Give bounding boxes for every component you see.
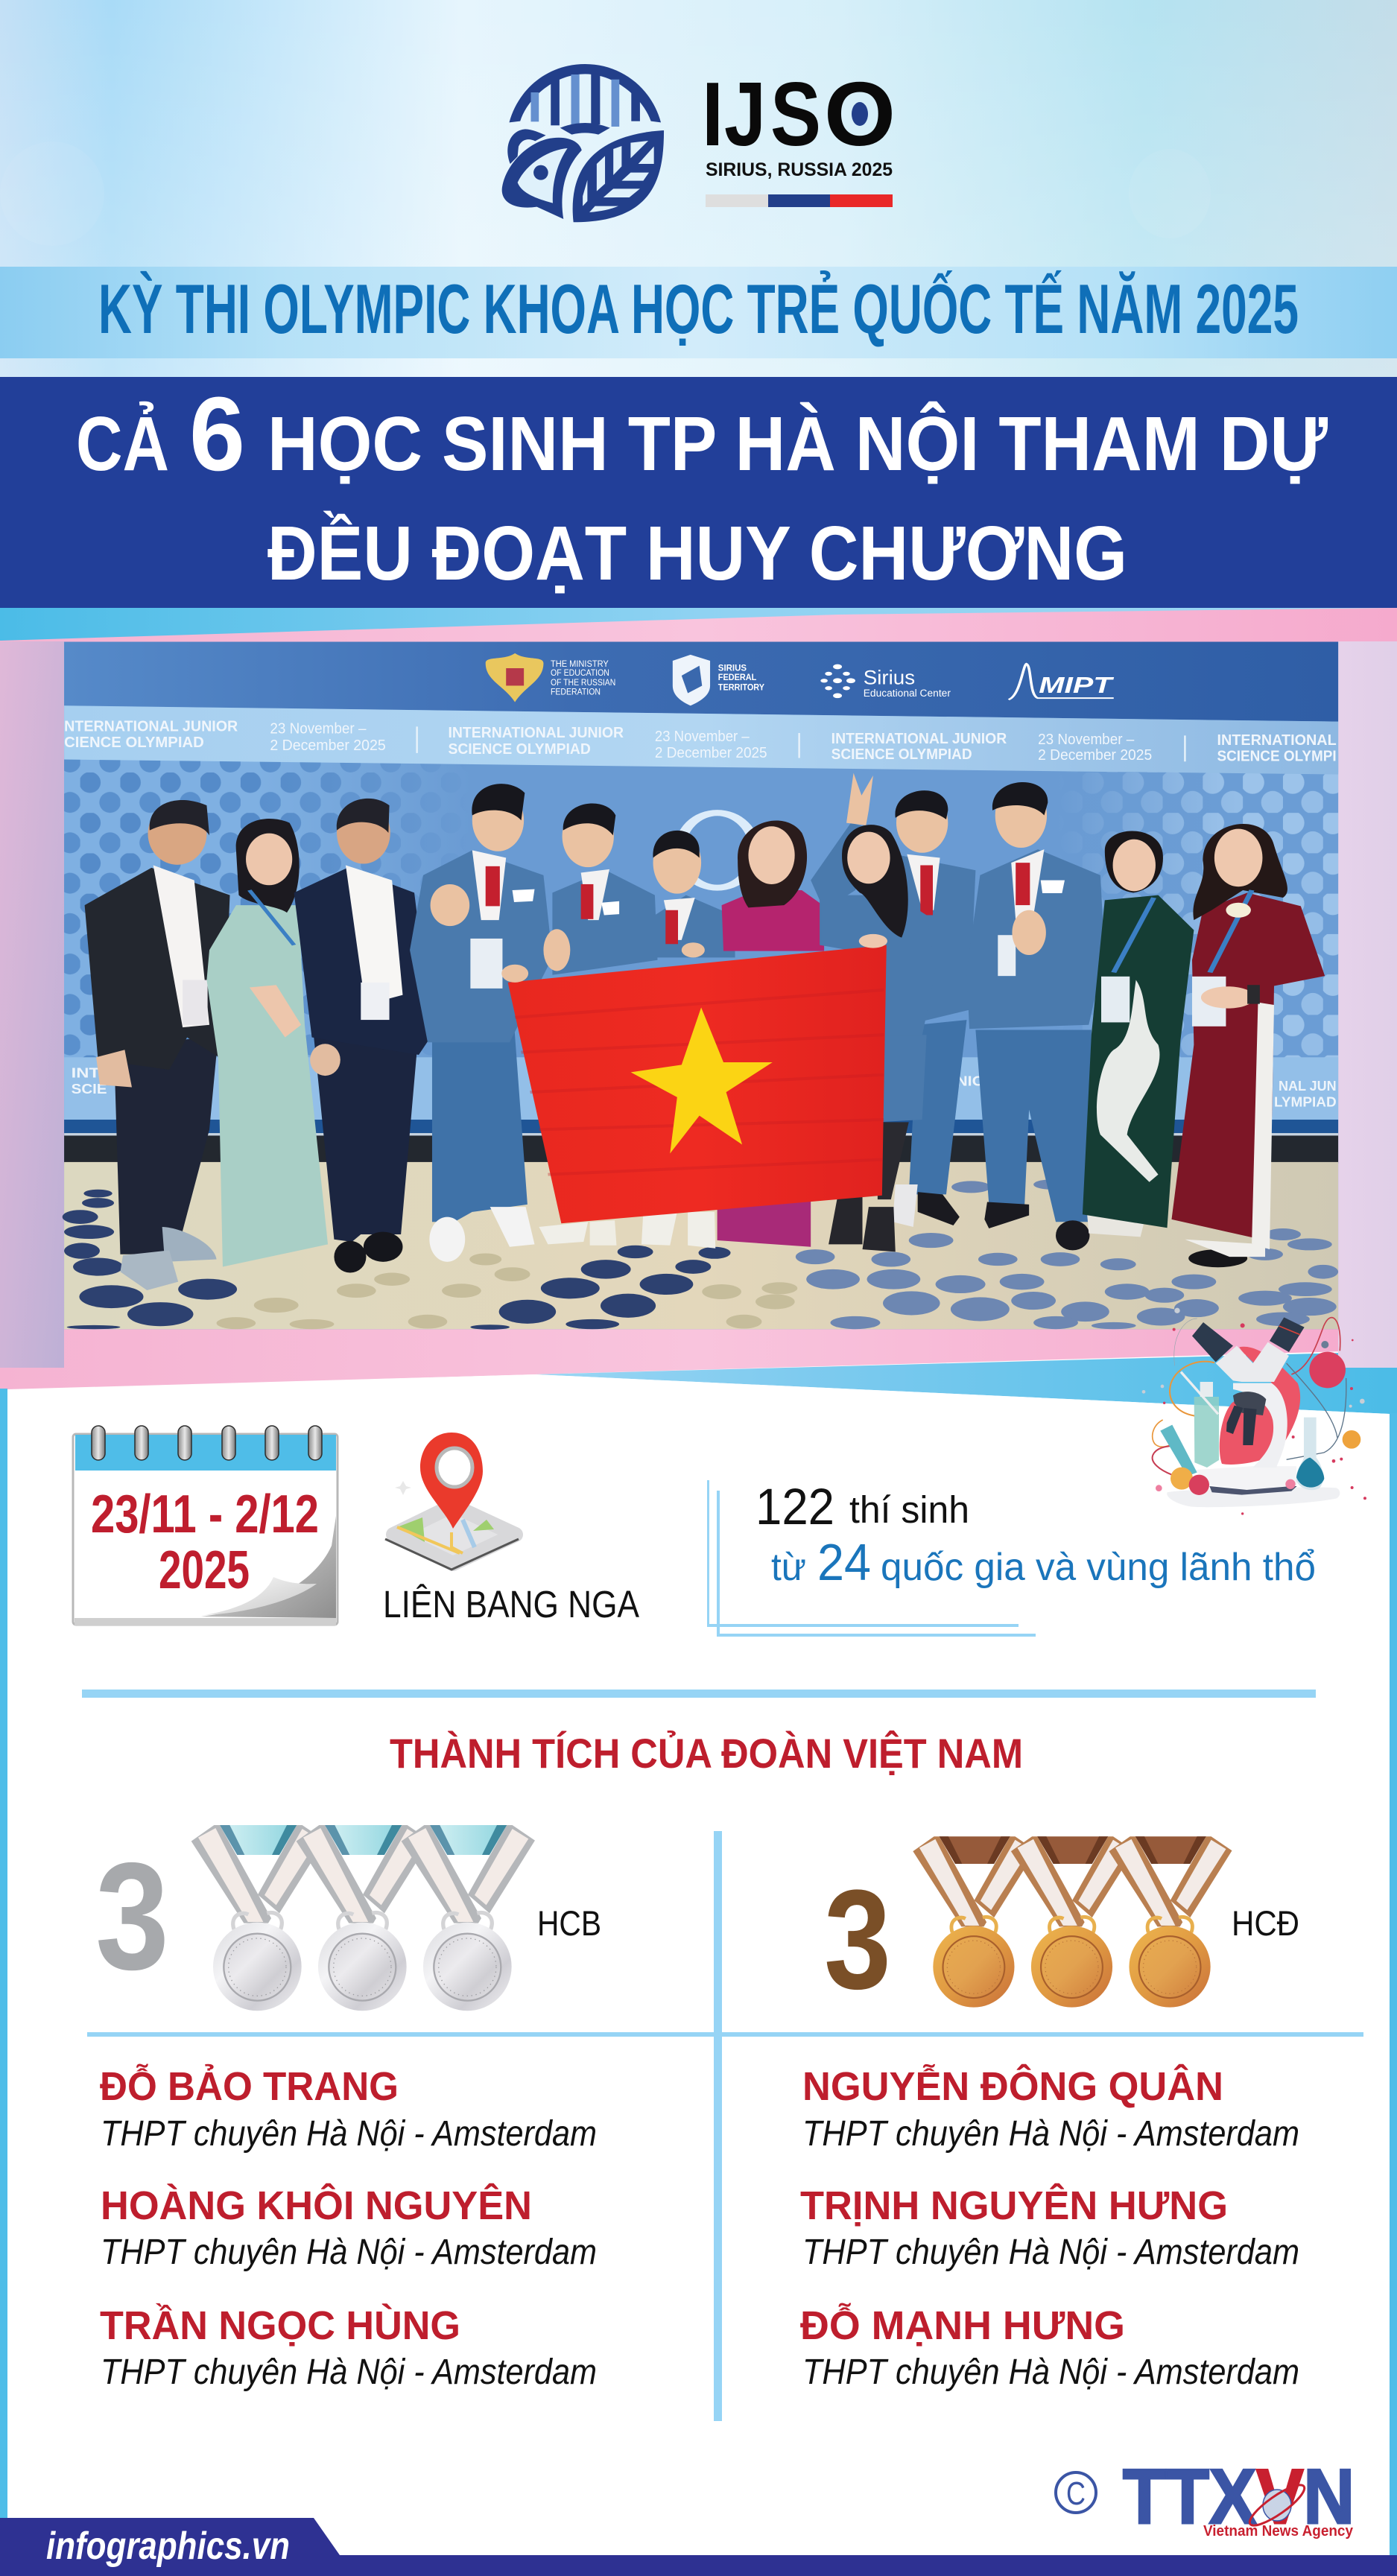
winner: Đỗ Bảo Trang: ĐỖ BẢO TRANG: [100, 2063, 399, 2109]
TTXVN logo: Vietnam News Agency: [1203, 2523, 1354, 2539]
photo backdrop banner: NTERNATIONAL JUNIOR: [64, 718, 238, 735]
red swirl: [1220, 1347, 1300, 1465]
photo lower backdrop: NAL JUN: [1279, 1078, 1337, 1094]
photo lower backdrop: LYMPIAD: [1274, 1094, 1337, 1110]
balls: [1309, 1352, 1346, 1388]
silver medal count: 3: [95, 1831, 169, 2002]
TTXVN logo: TTXVN: [1123, 2454, 1355, 2540]
photo backdrop banner: INTERNATIONAL JUNIOR: [831, 731, 1007, 747]
logo wordmark: J: [724, 63, 766, 165]
calendar year: 2025: [159, 1541, 250, 1600]
winner: Trần Ngọc Hùng: THPT chuyên Hà Nội - Amsterdam: [101, 2353, 597, 2392]
winner: Đỗ Mạnh Hưng: ĐỖ MẠNH HƯNG: [800, 2303, 1125, 2348]
photo carpet: [63, 1162, 1338, 1330]
photo backdrop banner: 2 December 2025: [1038, 747, 1152, 764]
bronze winners list: [800, 2063, 1299, 2392]
photo backdrop banner: OF EDUCATION: [551, 667, 609, 678]
grid lines: [87, 1831, 1363, 2421]
winner: Trần Ngọc Hùng: [100, 2303, 597, 2392]
photo backdrop banner: SIRIUS: [718, 662, 747, 673]
logo dot: [852, 102, 868, 126]
photo backdrop banner: SCIENCE OLYMPIAD: [448, 741, 591, 758]
person 10: tall boy blue suit: [966, 782, 1105, 1250]
title line 1: [76, 375, 1328, 492]
person 12: woman red velvet: [1171, 824, 1325, 1267]
photo backdrop banner: Sirius: [864, 667, 915, 689]
person 8: girl with peace sign: [811, 773, 936, 1251]
person 1: man dark jacket: [85, 800, 230, 1290]
location label: LIÊN BANG NGA: [383, 1583, 639, 1625]
stat: countries: từ: [771, 1546, 806, 1589]
stat: countries: [771, 1533, 1316, 1591]
winner: Đỗ Mạnh Hưng: THPT chuyên Hà Nội - Amsterdam: [802, 2353, 1299, 2392]
person 4: boy blue suit: [410, 784, 552, 1262]
calendar icon: [73, 1426, 338, 1625]
divider: [82, 1690, 1316, 1698]
copyright mark: C: [1066, 2475, 1086, 2512]
silver medals: [191, 1825, 535, 2011]
logo wordmark: I: [702, 63, 723, 165]
calendar curled page: [201, 1516, 336, 1618]
ribbon strip above photo: [0, 608, 1397, 642]
photo backdrop banner: 2 December 2025: [655, 745, 767, 761]
subtitle band: [0, 267, 1397, 358]
winner: Nguyễn Đông Quân: NGUYỄN ĐÔNG QUÂN: [802, 2063, 1223, 2109]
silver label: HCB: [537, 1903, 601, 1943]
photo backdrop banner: MIPT: [1039, 673, 1115, 698]
photo: delegation with flag: [63, 642, 1338, 1330]
person 11: woman green ao dai: [1083, 831, 1194, 1237]
winner: Đỗ Bảo Trang: [100, 2063, 597, 2154]
logo mark: [502, 64, 664, 222]
side panel left: [0, 641, 64, 1368]
footer bar: [0, 2518, 1397, 2576]
person 2: woman light ao dai: [206, 819, 328, 1267]
title line 1: 6: [189, 375, 245, 492]
microscope illustration: [1142, 1308, 1366, 1515]
bronze medals: [913, 1836, 1232, 2008]
logo subtitle: SIRIUS, RUSSIA 2025: [706, 159, 893, 180]
photo backdrop banner: 23 November –: [1038, 732, 1135, 748]
silver medal 1: [191, 1825, 325, 2011]
footer site name: infographics.vn: [46, 2525, 290, 2568]
photo backdrop banner: INTERNATIONAL JUNIOR: [448, 725, 624, 741]
lower ribbon and panel shapes: [0, 1329, 1397, 2563]
photo lower backdrop: INT: [72, 1065, 100, 1081]
person 5: boy blue suit with flag: [539, 803, 658, 1246]
photo backdrop banner: THE MINISTRY: [551, 659, 609, 669]
stat: contestants: thí sinh: [849, 1488, 969, 1531]
photo backdrop banner: SCIENCE OLYMPIAD: [831, 746, 972, 763]
copyright mark: [1056, 2472, 1096, 2513]
location icon: [385, 1433, 519, 1570]
person 6: boy with glasses: [642, 831, 735, 1249]
microscope objectives: [1233, 1392, 1266, 1415]
bronze medal 1: [913, 1836, 1036, 2008]
winner: Trần Ngọc Hùng: TRẦN NGỌC HÙNG: [100, 2303, 460, 2348]
microscope arm: [1233, 1383, 1287, 1468]
winner: Trịnh Nguyên Hưng: TRỊNH NGUYÊN HƯNG: [800, 2183, 1228, 2228]
photo backdrop banner: CIENCE OLYMPIAD: [64, 735, 204, 751]
bronze label: HCĐ: [1232, 1903, 1299, 1943]
photo lower backdrop: SCIE: [72, 1081, 107, 1097]
silver medal 3: [402, 1825, 535, 2011]
photo backdrop banner: 23 November –: [270, 720, 367, 737]
russian flag bar: [706, 194, 893, 207]
photo backdrop banner: FEDERAL: [718, 672, 756, 682]
IJSO logo: [502, 63, 896, 222]
side panel right: [1338, 641, 1397, 1368]
bronze medal count: 3: [824, 1861, 891, 2019]
bronze medal 3: [1109, 1836, 1232, 2008]
microscope eyepieces: [1216, 1342, 1289, 1382]
person 7: woman magenta: [717, 820, 824, 1247]
stat: countries: 24: [817, 1533, 871, 1591]
title line 1: CẢ: [76, 401, 169, 486]
achievements heading: THÀNH TÍCH CỦA ĐOÀN VIỆT NAM: [390, 1730, 1023, 1777]
winner: Hoàng Khôi Nguyên: [101, 2183, 597, 2272]
logo wordmark: [702, 63, 896, 165]
calendar date: 23/11 - 2/12: [91, 1485, 319, 1544]
microscope base: [1167, 1488, 1340, 1507]
logo wordmark: O: [824, 63, 896, 165]
photo lower backdrop: NIO: [956, 1073, 984, 1089]
winner: Hoàng Khôi Nguyên: THPT chuyên Hà Nội - Amsterdam: [101, 2233, 597, 2272]
stat: contestants: [755, 1478, 969, 1535]
photo backdrop banner: 23 November –: [655, 728, 750, 745]
winner: Trịnh Nguyên Hưng: [800, 2183, 1299, 2272]
orange wire rings: [1170, 1362, 1214, 1416]
winner: Nguyễn Đông Quân: THPT chuyên Hà Nội - Amsterdam: [802, 2114, 1299, 2154]
photo backdrop banner: FEDERATION: [551, 686, 601, 697]
title panel: [0, 375, 1397, 608]
winner: Đỗ Mạnh Hưng: [800, 2303, 1299, 2392]
photo wall with dots: [64, 642, 1338, 1329]
stat: contestants: 122: [755, 1478, 834, 1535]
person 3: man navy suit: [294, 799, 432, 1273]
photo backdrop banner: OF THE RUSSIAN: [551, 677, 615, 688]
title line 2: ĐỀU ĐOẠT HUY CHƯƠNG: [267, 510, 1127, 596]
photo backdrop banner: [64, 642, 1338, 775]
silver winners list: [100, 2063, 597, 2392]
silver medal 2: [297, 1825, 430, 2011]
bronze medal 2: [1011, 1836, 1134, 2008]
stat: countries: quốc gia và vùng lãnh thổ: [881, 1546, 1316, 1589]
glassware: [1194, 1397, 1219, 1468]
logo wordmark: S: [770, 63, 821, 165]
winner: Đỗ Bảo Trang: THPT chuyên Hà Nội - Amsterdam: [101, 2114, 597, 2154]
calendar rings: [92, 1426, 322, 1460]
photo backdrop banner: Educational Center: [864, 688, 951, 699]
winner: Hoàng Khôi Nguyên: HOÀNG KHÔI NGUYÊN: [101, 2183, 532, 2228]
photo backdrop banner: 2 December 2025: [270, 737, 386, 754]
header background: [0, 0, 1397, 387]
person 9: boy with glasses behind: [878, 790, 975, 1227]
photo backdrop banner: TERRITORY: [718, 682, 764, 692]
winner: Trịnh Nguyên Hưng: THPT chuyên Hà Nội - Amsterdam: [802, 2233, 1299, 2272]
photo lower backdrop: [64, 1057, 1338, 1164]
faint olympiad logo behind people: [680, 813, 755, 888]
winner: Nguyễn Đông Quân: [802, 2063, 1299, 2154]
vietnamese flag: [501, 934, 887, 1223]
stats frame: [707, 1480, 1036, 1637]
